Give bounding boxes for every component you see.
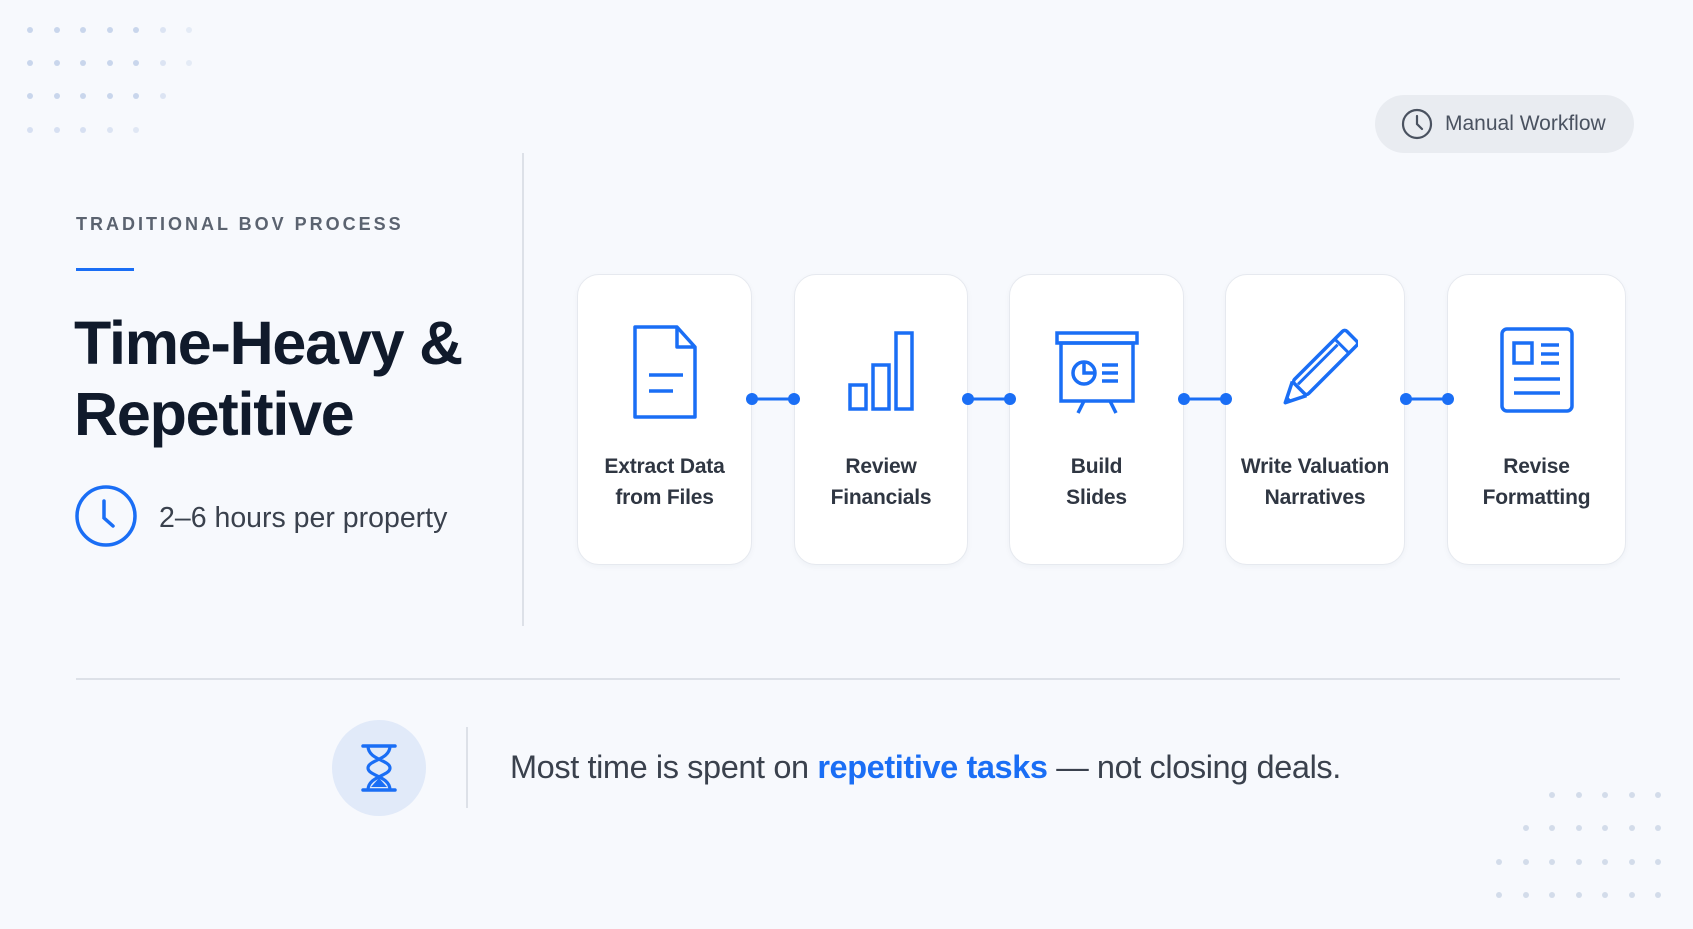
icon: newspaper layout (1500, 327, 1574, 413)
icon: document (633, 325, 697, 419)
card: Write Valuation Narratives: Write Valuation (1241, 455, 1389, 478)
title: Time-Heavy & (74, 309, 462, 377)
connector 1 (746, 393, 800, 405)
card: Review Financials: Financials (831, 486, 931, 509)
badge: Manual Workflow: Manual Workflow (1445, 112, 1606, 135)
icon: presentation (1055, 331, 1139, 414)
icon: pencil (1284, 328, 1358, 404)
card: Build Slides: Build (1071, 455, 1122, 478)
icon: hourglass (332, 720, 426, 816)
card: Extract Data (577, 274, 752, 565)
card: Revise Formatting: Formatting (1483, 486, 1590, 509)
time estimate (75, 485, 448, 547)
card: Review Financials: Review (845, 455, 917, 478)
connector 4 (1400, 393, 1454, 405)
card: Build Slides: Slides (1066, 486, 1127, 509)
card: Build Slides (1009, 274, 1184, 565)
takeaway text: Most time is spent on repetitive tasks — not closing deals. (510, 749, 1341, 785)
title: Repetitive (74, 380, 354, 448)
card: Extract Data: Extract Data (604, 455, 725, 478)
eyebrow label: TRADITIONAL BOV PROCESS (76, 214, 404, 234)
card: Write Valuation Narratives (1225, 274, 1405, 565)
connector 2 (962, 393, 1016, 405)
card: Write Valuation Narratives: Narratives (1265, 486, 1365, 509)
card: Extract Data: from Files (615, 486, 714, 509)
time estimate: 2–6 hours per property (159, 502, 447, 534)
card: Revise Formatting: Revise (1503, 455, 1570, 478)
small divider (466, 727, 468, 808)
badge: Manual Workflow (1375, 95, 1634, 153)
card: Revise Formatting (1447, 274, 1626, 565)
card: Review Financials (794, 274, 968, 565)
icon: bar chart (848, 331, 914, 411)
decorative dots top-left (27, 27, 192, 133)
horizontal rule (76, 678, 1620, 680)
accent underline (76, 268, 134, 271)
connector 3 (1178, 393, 1232, 405)
decorative dots bottom-right (1496, 792, 1661, 898)
title (74, 309, 462, 448)
vertical divider (522, 153, 524, 626)
